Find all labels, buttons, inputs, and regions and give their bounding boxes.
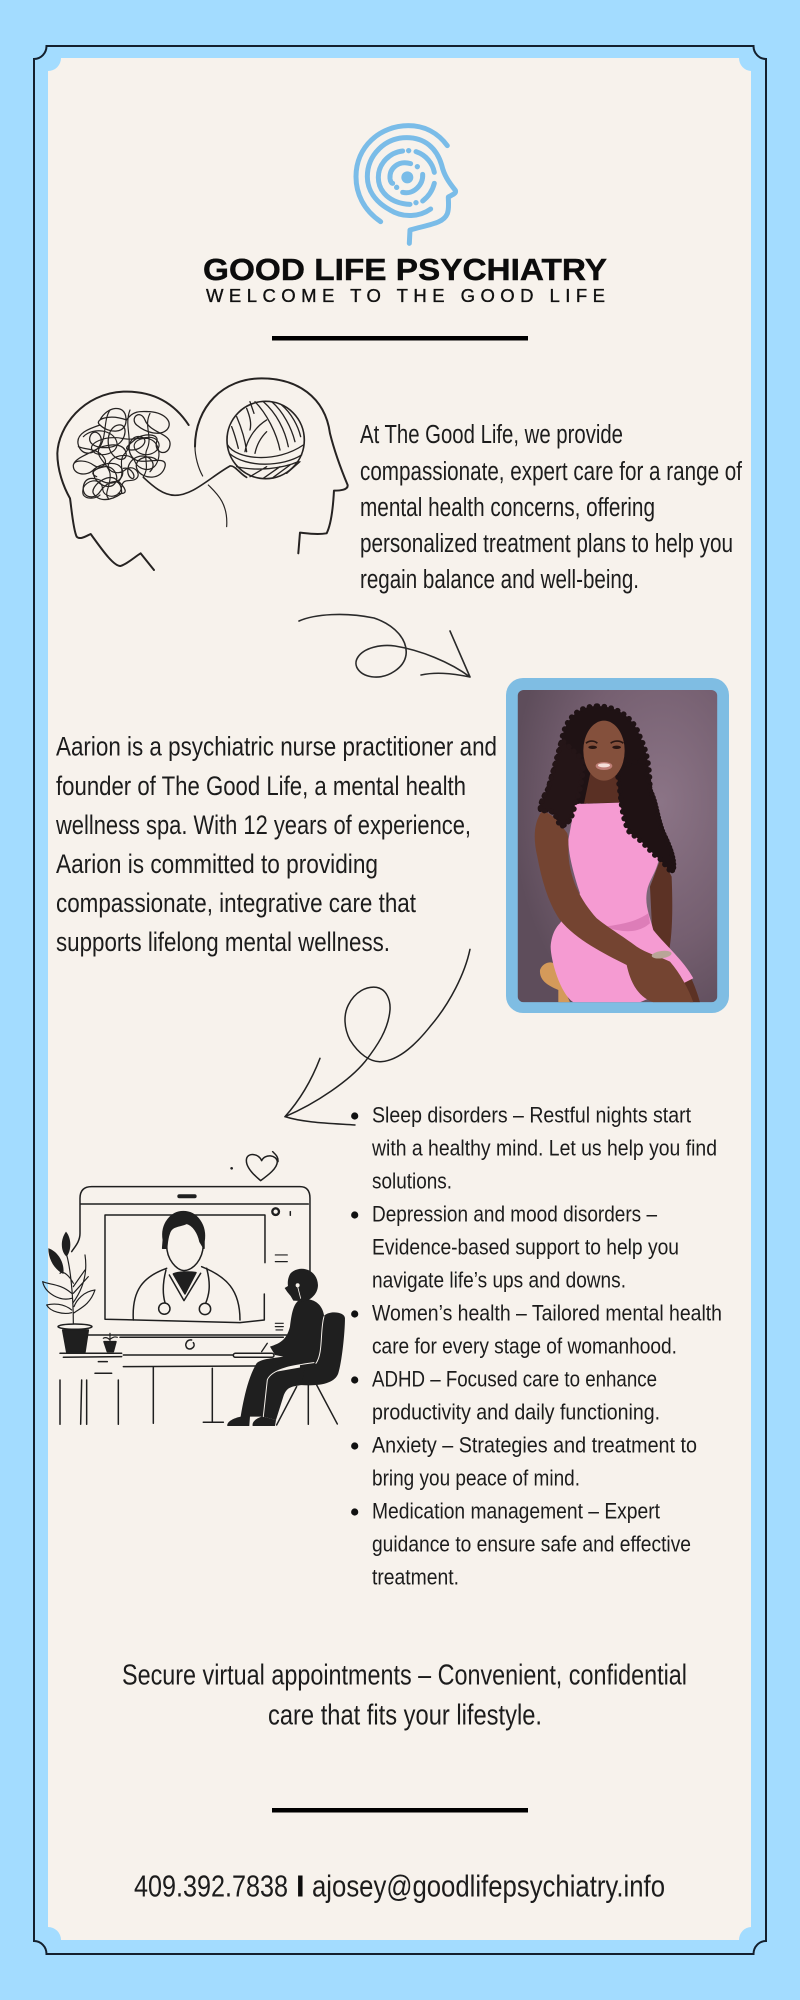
yarn ball xyxy=(227,401,304,479)
paragraph: about Aarion: founder of The Good Life, a mental health xyxy=(56,771,466,801)
heart xyxy=(246,1152,278,1181)
services bullet list: Anxiety – Strategies and treatment to xyxy=(372,1432,697,1458)
paragraph: about Aarion: wellness spa. With 12 years of experience, xyxy=(55,810,471,840)
paragraph: about Aarion: compassionate, integrative care that xyxy=(56,888,416,918)
divider bottom xyxy=(272,1808,528,1812)
paragraph: intro xyxy=(360,421,743,594)
divider top xyxy=(272,336,528,340)
title: GOOD LIFE PSYCHIATRY xyxy=(203,253,607,287)
paragraph: intro: At The Good Life, we provide xyxy=(360,421,623,449)
paragraph: about Aarion xyxy=(55,732,497,957)
contact line: I xyxy=(296,1868,305,1904)
services bullet list: Sleep disorders – Restful nights start xyxy=(372,1102,692,1128)
services bullet list: bring you peace of mind. xyxy=(372,1466,580,1490)
tangled scribble xyxy=(73,408,170,500)
paragraph: intro: regain balance and well-being. xyxy=(360,566,639,594)
services bullet list: care for every stage of womanhood. xyxy=(372,1334,677,1358)
services bullet list xyxy=(351,1102,722,1590)
hair back xyxy=(540,706,674,871)
right arm xyxy=(650,860,700,1002)
neck xyxy=(584,773,620,804)
services bullet list: with a healthy mind. Let us help you find xyxy=(371,1136,717,1160)
paragraph: intro: mental health concerns, offering xyxy=(360,494,655,522)
left head outline xyxy=(57,392,189,570)
services bullet list: solutions. xyxy=(372,1168,452,1194)
plant xyxy=(43,1255,95,1323)
closing statement xyxy=(122,1660,687,1732)
face xyxy=(583,721,625,781)
bullets xyxy=(351,1112,358,1516)
portrait illustration xyxy=(518,690,717,1002)
monitor xyxy=(72,1187,310,1273)
doctor xyxy=(163,1212,204,1248)
services bullet list: treatment. xyxy=(372,1564,459,1590)
hair front xyxy=(617,760,674,871)
services bullet list: Women’s health – Tailored mental health xyxy=(372,1300,722,1326)
logo: blue head with rings xyxy=(356,126,456,243)
bracelet xyxy=(652,950,672,958)
services bullet list: Evidence-based support to help you xyxy=(372,1234,679,1260)
right head outline xyxy=(195,378,348,553)
video screen xyxy=(105,1215,265,1323)
services bullet list: ADHD – Focused care to enhance xyxy=(372,1366,657,1392)
services bullet list: Depression and mood disorders – xyxy=(372,1202,657,1226)
patient chair xyxy=(300,1312,345,1385)
monitor base and desk xyxy=(60,1335,287,1373)
closing statement: care that fits your lifestyle. xyxy=(268,1700,542,1732)
arrow: looping to services list xyxy=(285,949,470,1125)
paragraph: about Aarion: Aarion is a psychiatric nurse practitioner and xyxy=(56,732,497,762)
stool xyxy=(540,962,570,1002)
dress xyxy=(551,803,693,1002)
tagline: WELCOME TO THE GOOD LIFE xyxy=(206,285,605,306)
portrait frame xyxy=(506,678,729,1013)
paragraph: about Aarion: Aarion is committed to providing xyxy=(56,849,378,879)
contact line xyxy=(134,1868,665,1904)
paragraph: about Aarion: supports lifelong mental wellness. xyxy=(56,927,390,957)
string connecting heads xyxy=(143,466,247,495)
closing statement: Secure virtual appointments – Convenient, confidential xyxy=(122,1660,687,1692)
services bullet list: guidance to ensure safe and effective xyxy=(372,1532,691,1556)
patient head xyxy=(285,1269,318,1301)
left arm and hands xyxy=(535,812,693,1002)
services bullet list: productivity and daily functioning. xyxy=(372,1400,660,1424)
services bullet list: Medication management – Expert xyxy=(372,1498,661,1524)
patient body xyxy=(227,1299,324,1426)
contact line: 409.392.7838 xyxy=(134,1868,288,1904)
illustration: two heads tangled and yarn xyxy=(57,378,348,570)
illustration: telehealth video call xyxy=(43,1152,345,1426)
arrow: curly to portrait xyxy=(299,614,470,677)
patient second leg xyxy=(263,1367,305,1420)
services bullet list: navigate life’s ups and downs. xyxy=(372,1268,626,1292)
contact line: ajosey@goodlifepsychiatry.info xyxy=(312,1868,665,1904)
